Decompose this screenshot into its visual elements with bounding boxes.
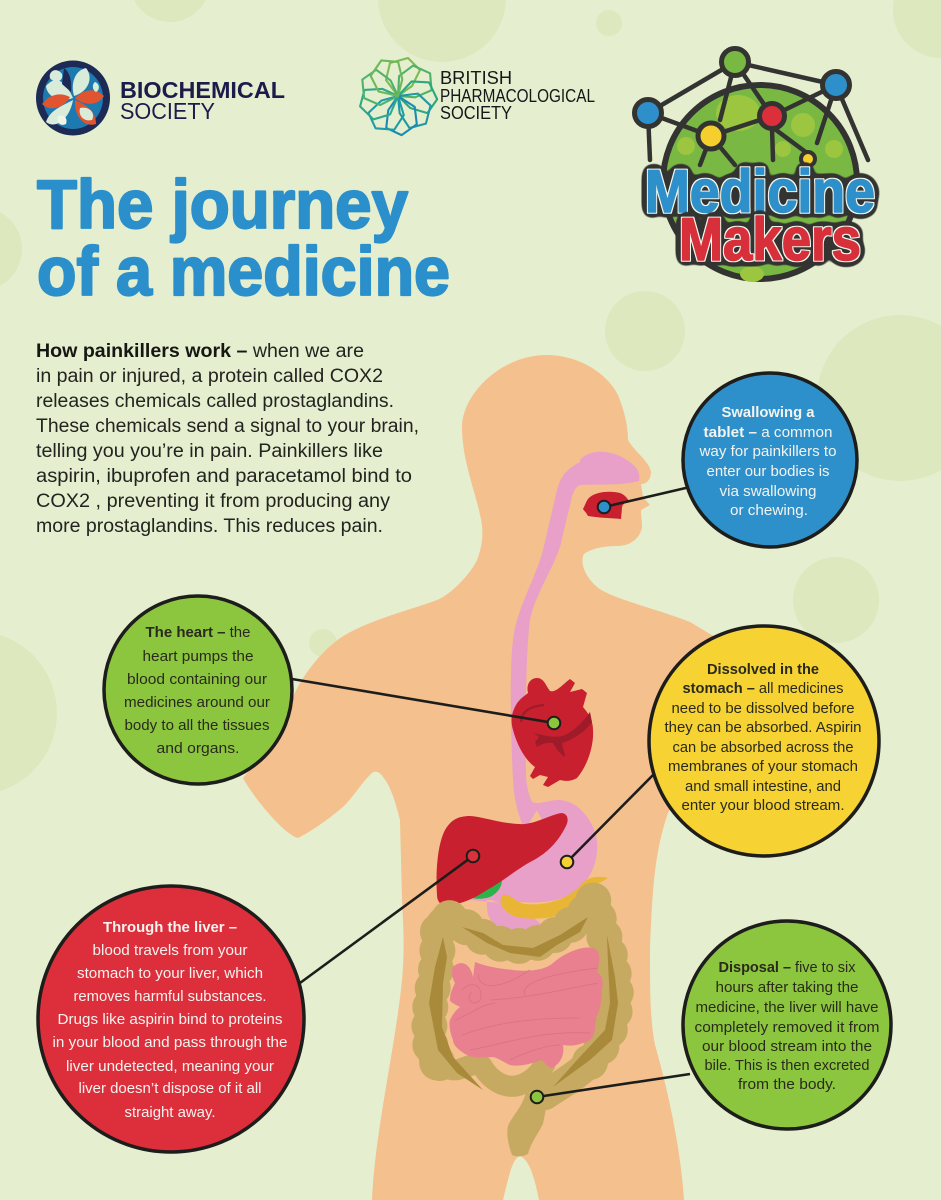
callout: disposal: hours after taking the	[716, 979, 858, 996]
callout: through the liver	[38, 886, 304, 1152]
callout: disposal: medicine, the liver will have	[696, 999, 878, 1016]
callout: the heart: body to all the tissues	[124, 717, 270, 734]
human body silhouette	[243, 355, 720, 1200]
text block: how painkillers work: more prostaglandins. This reduces pain.	[36, 516, 383, 537]
large intestine inner shading	[429, 917, 618, 1090]
organ: stomach	[470, 800, 597, 938]
logo: Biochemical Society	[36, 60, 285, 136]
text block: how painkillers work: aspirin, ibuprofen and paracetamol bind to	[36, 466, 412, 487]
connector: heart to heart callout	[292, 679, 554, 723]
callout: disposal: Disposal – five to six	[718, 959, 856, 976]
callout: swallowing a tablet: tablet – a common	[704, 424, 832, 441]
callout: through the liver: Drugs like aspirin bind to proteins	[58, 1011, 282, 1028]
wordmark: Biochemical Society: BIOCHEMICAL	[120, 77, 285, 103]
title: of a medicine	[37, 233, 450, 310]
text block: how painkillers work: These chemicals send a signal to your brain,	[36, 416, 419, 437]
callout: disposal: completely removed it from	[694, 1019, 880, 1036]
text block: how painkillers work: in pain or injured, a protein called COX2	[36, 366, 383, 387]
icon: pharmacological rosette	[354, 53, 439, 139]
callout: through the liver: Through the liver –	[103, 919, 237, 936]
callout: through the liver: removes harmful substances.	[74, 988, 266, 1005]
callout: the heart: blood containing our	[127, 671, 267, 688]
network lines	[648, 62, 868, 165]
callout: disposal: from the body.	[738, 1076, 836, 1093]
wordmark: Makers: Makers	[679, 206, 861, 273]
organ: large intestine	[429, 898, 616, 1095]
organ: pancreas	[501, 877, 608, 919]
callout: the heart: medicines around our	[124, 694, 270, 711]
callout: swallowing a tablet: way for painkillers to	[698, 443, 836, 460]
icon: Biochemical Society emblem	[36, 60, 110, 136]
callout: through the liver: in your blood and pass through the	[52, 1034, 288, 1051]
logo: Medicine Makers	[634, 48, 875, 282]
text block: how painkillers work: releases chemicals called prostaglandins.	[36, 391, 394, 412]
callout: the heart: and organs.	[156, 740, 240, 757]
text block: how painkillers work	[36, 341, 419, 537]
callout: through the liver: stomach to your liver, which	[77, 965, 263, 982]
marker dot: liver	[467, 850, 479, 862]
callout: swallowing a tablet: or chewing.	[730, 502, 808, 519]
wordmark: Biochemical Society	[120, 77, 285, 124]
callout: dissolved in the stomach: stomach – all medicines	[682, 681, 844, 697]
connector: rectum to disposal callout	[537, 1074, 690, 1097]
globe	[663, 85, 857, 282]
callout: disposal: bile. This is then excreted	[704, 1057, 870, 1074]
connector: liver to liver callout	[300, 856, 473, 983]
callout: dissolved in the stomach: need to be dissolved before	[672, 701, 854, 717]
connector: mouth to swallowing callout	[604, 487, 690, 507]
marker dot: stomach	[561, 856, 573, 868]
organ: heart	[512, 678, 593, 787]
wordmark: British Pharmacological Society: PHARMACOLOGICAL	[440, 85, 595, 106]
logo: British Pharmacological Society	[354, 53, 595, 139]
connector: stomach to stomach callout	[567, 774, 654, 862]
network nodes	[634, 48, 850, 166]
organ: liver	[437, 813, 568, 905]
wordmark: British Pharmacological Society: BRITISH	[440, 67, 512, 88]
callout: dissolved in the stomach: membranes of your stomach	[668, 759, 858, 775]
rectum	[507, 1092, 548, 1156]
callout: swallowing a tablet	[683, 373, 857, 547]
wordmark: British Pharmacological Society	[440, 67, 595, 123]
title	[37, 166, 450, 310]
callout: disposal: our blood stream into the	[702, 1038, 872, 1055]
title: The journey	[37, 166, 408, 243]
marker dot: mouth	[598, 501, 610, 513]
organ: mouth	[583, 492, 629, 519]
callout: through the liver: straight away.	[124, 1104, 216, 1121]
callout: dissolved in the stomach: Dissolved in the	[707, 662, 819, 678]
callout: dissolved in the stomach: can be absorbed across the	[672, 740, 854, 756]
text block: how painkillers work: telling you you’re in pain. Painkillers like	[36, 441, 383, 462]
text block: how painkillers work: COX2 , preventing it from producing any	[36, 491, 391, 512]
callout: the heart	[104, 596, 292, 784]
callout: dissolved in the stomach: they can be absorbed. Aspirin	[664, 720, 862, 736]
callout: disposal	[683, 921, 891, 1129]
text block: how painkillers work: How painkillers work – when we are	[36, 341, 364, 362]
organ: gallbladder	[468, 873, 502, 899]
callout: swallowing a tablet: enter our bodies is	[706, 463, 830, 480]
callout: through the liver: liver undetected, meaning your	[66, 1058, 274, 1075]
callout: dissolved in the stomach	[649, 626, 879, 856]
callout: dissolved in the stomach: and small intestine, and	[685, 779, 841, 795]
callout: through the liver: blood travels from your	[92, 942, 248, 959]
wordmark: Biochemical Society: SOCIETY	[120, 98, 215, 124]
organ: oesophagus and nasal cavity	[511, 452, 639, 830]
callout: swallowing a tablet: Swallowing a	[722, 404, 815, 421]
marker dot: rectum	[531, 1091, 543, 1103]
background bubbles	[0, 0, 941, 795]
callout: through the liver: liver doesn’t dispose of it all	[78, 1080, 262, 1097]
callout: the heart: heart pumps the	[142, 648, 254, 665]
wordmark: British Pharmacological Society: SOCIETY	[440, 102, 512, 123]
callout: swallowing a tablet: via swallowing	[720, 483, 816, 500]
wordmark: Medicine: Medicine	[645, 158, 875, 225]
callout: the heart: The heart – the	[146, 624, 250, 641]
callout: dissolved in the stomach: enter your blood stream.	[682, 798, 844, 814]
marker dot: heart	[548, 717, 560, 729]
organ: small intestine	[449, 947, 603, 1068]
